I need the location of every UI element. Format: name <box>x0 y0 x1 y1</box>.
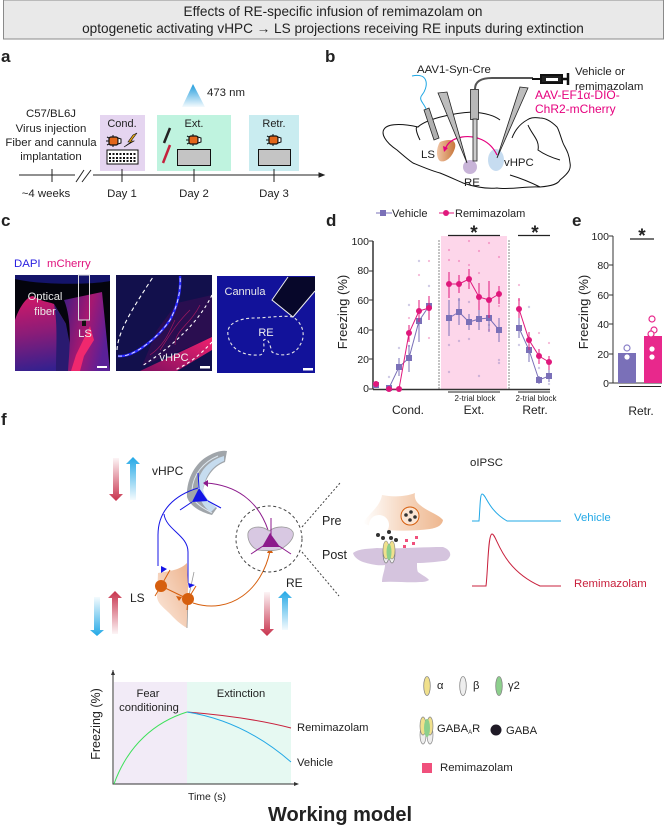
axes: 60 <box>357 295 369 307</box>
panel letter d: d <box>326 211 336 230</box>
bars <box>618 353 636 383</box>
x labels: Ext. <box>464 403 484 417</box>
purple projection <box>206 483 268 530</box>
text labels b: ChR2-mCherry <box>535 102 616 116</box>
legend: receptor subunits: β <box>473 680 479 692</box>
pathway arrow <box>445 137 497 155</box>
panel: f working model <box>1 410 647 826</box>
region: RE <box>463 160 477 174</box>
orange projection <box>193 551 270 606</box>
dashed separators <box>439 240 509 389</box>
legend: receptor subunits: α <box>437 680 444 692</box>
panel: b brain schematic <box>325 47 643 189</box>
box: Cond.: Cond. <box>107 118 137 130</box>
y label: Freezing (%) <box>335 275 350 349</box>
axis: 40 <box>597 319 609 331</box>
legend: receptor subunits <box>420 676 538 774</box>
labels Pre Post <box>322 514 348 562</box>
significance <box>630 226 654 247</box>
oIPSC traces: Vehicle <box>574 512 611 524</box>
panel: c histology <box>1 211 315 373</box>
title: optogenetic activating vHPC → LS projections receiving RE inputs during extinction <box>82 21 584 36</box>
text labels b: LS <box>421 149 435 161</box>
axes: 80 <box>357 265 369 277</box>
region: LS <box>157 563 188 628</box>
timeline labels <box>22 188 289 200</box>
icon: 473 nm light: 473 nm <box>207 87 245 99</box>
significance bars: * <box>531 223 539 244</box>
blue projections <box>158 488 198 583</box>
synapse <box>353 493 450 582</box>
shaded extinction area <box>441 236 507 389</box>
box: Ext. <box>157 115 231 171</box>
icon: 473 nm light <box>182 84 245 107</box>
image: LS: Optical <box>28 291 62 303</box>
image: RE: Cannula <box>225 286 266 298</box>
freezing schematic graph: Fear <box>136 688 160 700</box>
timeline labels: ~4 weeks <box>22 188 71 200</box>
legend: Vehicle <box>392 208 427 220</box>
freezing schematic graph: Extinction <box>217 688 265 700</box>
freezing schematic graph: Remimazolam <box>297 722 368 734</box>
timeline labels: Day 3 <box>259 188 289 200</box>
x labels: 2-trial block <box>455 394 496 403</box>
blue arrowheads <box>161 566 195 588</box>
legend DAPI mCherry <box>14 258 91 270</box>
freezing schematic graph: Vehicle <box>297 757 333 769</box>
freezing schematic graph: Freezing (%) <box>89 688 103 760</box>
oIPSC traces: Remimazolam <box>574 578 647 590</box>
text labels b: vHPC <box>504 157 534 169</box>
image: vHPC <box>116 275 212 371</box>
axis <box>591 231 662 390</box>
legend <box>376 208 525 220</box>
region: vHPC: vHPC <box>152 464 184 478</box>
panel letter b: b <box>325 47 335 66</box>
significance bars <box>448 223 550 244</box>
arrows: LS <box>90 591 122 636</box>
x labels: 2-trial block <box>516 394 557 403</box>
panel: d line chart <box>326 208 557 417</box>
oIPSC traces: oIPSC <box>470 457 503 469</box>
orange LS neurons <box>130 570 196 610</box>
blue neuron <box>180 473 221 510</box>
image: RE <box>217 276 315 373</box>
text: surgery: Fiber and cannula <box>5 137 97 149</box>
x labels: Cond. <box>392 403 424 417</box>
box: Retr. <box>249 115 299 171</box>
text: surgery: C57/BL6J <box>26 108 76 120</box>
x label: Retr. <box>628 404 654 418</box>
text: surgery: implantation <box>20 151 82 163</box>
axes: 40 <box>357 325 369 337</box>
axis: 0 <box>603 378 609 390</box>
region: RE <box>236 506 303 590</box>
region: LS <box>437 140 455 161</box>
axis: 80 <box>597 260 609 272</box>
y label: Freezing (%) <box>576 275 591 349</box>
data points <box>624 316 657 359</box>
individual points <box>408 240 550 344</box>
pipette right <box>497 87 528 158</box>
freezing schematic graph <box>89 670 368 803</box>
axes: 0 <box>363 383 369 395</box>
panel: a timeline <box>1 47 324 200</box>
legend: receptor subunits: γ2 <box>508 680 520 692</box>
brain outline <box>383 112 570 189</box>
significance: * <box>638 226 646 247</box>
timeline labels: Day 2 <box>179 188 209 200</box>
legend: receptor subunits: Remimazolam <box>440 762 513 774</box>
axes: 20 <box>357 354 369 366</box>
series: remimazolam <box>389 269 549 389</box>
labels Pre Post: Pre <box>322 514 342 528</box>
panel letter a: a <box>1 47 11 66</box>
axes: 100 <box>351 236 369 248</box>
image: LS <box>15 275 110 371</box>
labels Pre Post: Post <box>322 548 348 562</box>
image: RE: RE <box>258 327 274 339</box>
region: vHPC <box>488 149 504 171</box>
pipette left <box>438 92 467 163</box>
x labels <box>392 392 557 417</box>
text labels b: remimazolam <box>575 81 643 93</box>
dashed zoom lines <box>302 483 340 596</box>
text labels b: Vehicle or <box>575 66 625 78</box>
x labels: Retr. <box>522 403 548 417</box>
legend: receptor subunits: GABA <box>506 725 538 737</box>
timeline labels: Day 1 <box>107 188 137 200</box>
region: RE: RE <box>286 576 303 590</box>
heading: working model: Working model <box>268 804 412 826</box>
freezing schematic graph: conditioning <box>119 702 179 714</box>
text: surgery: Virus injection <box>16 123 86 135</box>
image: LS: LS <box>78 328 92 340</box>
image: LS: fiber <box>34 306 56 318</box>
text labels b <box>417 64 643 189</box>
text labels b: AAV-EF1α-DIO- <box>535 88 620 102</box>
legend: Remimazolam <box>455 208 525 220</box>
title <box>4 0 664 39</box>
legend DAPI mCherry: mCherry <box>47 258 91 270</box>
significance bars: * <box>470 223 478 244</box>
tube and syringe <box>475 73 568 89</box>
text labels b: RE <box>464 177 480 189</box>
axis: 60 <box>597 290 609 302</box>
arrows: vHPC <box>109 457 140 501</box>
oIPSC traces <box>470 457 647 590</box>
arrows: RE <box>260 591 292 636</box>
axis: 20 <box>597 349 609 361</box>
region: vHPC <box>152 451 227 515</box>
text labels b: AAV1-Syn-Cre <box>417 64 491 76</box>
cannula <box>470 90 478 161</box>
legend: receptor subunits: GABA <box>437 723 468 735</box>
panel letter c: c <box>1 211 10 230</box>
optical fiber <box>412 75 439 140</box>
panel letter e: e <box>572 211 581 230</box>
title: Effects of RE-specific infusion of remimazolam on <box>184 4 482 19</box>
axis: 100 <box>591 231 609 243</box>
legend: receptor subunits: R <box>472 723 480 735</box>
series: vehicle <box>389 298 549 388</box>
legend DAPI mCherry: DAPI <box>14 258 41 270</box>
panel: e bar chart <box>572 211 662 418</box>
axes <box>351 236 550 395</box>
timeline axis <box>19 169 324 182</box>
box: Ext.: Ext. <box>185 118 203 130</box>
legend: receptor subunits: A <box>468 730 472 736</box>
box: Retr.: Retr. <box>262 118 286 130</box>
panel letter f: f <box>1 410 7 429</box>
box: Cond. <box>100 115 145 171</box>
text: surgery <box>5 108 97 163</box>
freezing schematic graph: Time (s) <box>188 791 226 803</box>
x label <box>619 386 661 418</box>
orange LS neurons: LS <box>130 591 145 605</box>
image: vHPC: vHPC <box>159 352 189 364</box>
